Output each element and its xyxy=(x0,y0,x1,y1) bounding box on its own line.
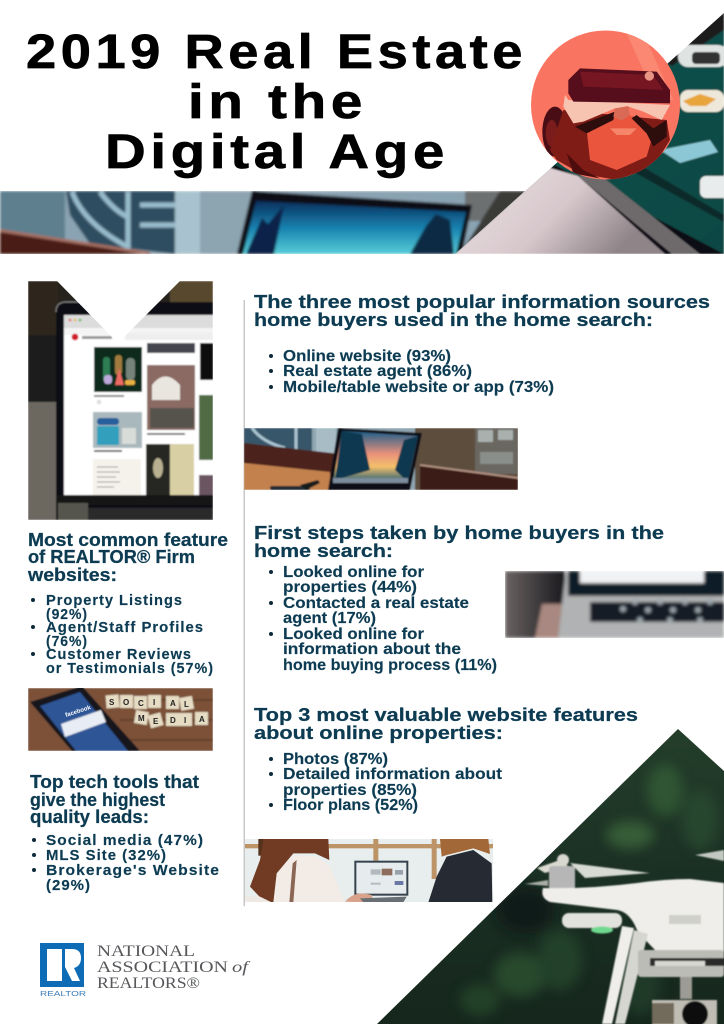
list: information sources: Real estate agent (86%) xyxy=(283,363,472,380)
logo: REALTOR R block xyxy=(40,943,87,998)
list: valuable features: Floor plans (52%) xyxy=(283,797,418,814)
photo: Facebook phone and social media tiles: O xyxy=(123,698,129,707)
heading: valuable website features: about online properties: xyxy=(254,722,503,743)
list: firm website features xyxy=(31,592,214,677)
heading: information sources xyxy=(254,291,710,330)
logo: National Association of Realtors wordmark: REALTORS® xyxy=(97,975,200,992)
list: firm website features: Property Listings xyxy=(46,592,183,609)
heading: top tech tools: Top tech tools that xyxy=(30,771,199,792)
list: first steps: properties (44%) xyxy=(283,579,417,596)
photo: Facebook phone and social media tiles: A xyxy=(199,715,205,724)
heading: first steps: home search: xyxy=(254,540,393,561)
icon: VR headset circle xyxy=(530,30,680,180)
title: 2019 Real Estate xyxy=(26,26,527,79)
heading: top tech tools: quality leads: xyxy=(30,806,149,827)
facebook wordmark: facebook xyxy=(65,705,92,719)
photo: laptop on desk xyxy=(244,428,518,490)
heading: information sources: home buyers used in the home search: xyxy=(254,309,653,330)
list: information sources: Mobile/table website or app (73%) xyxy=(283,379,554,396)
logo: National Association of Realtors wordmark: ASSOCIATION xyxy=(97,959,229,976)
list: tech tools: Brokerage's Website xyxy=(46,862,220,879)
heading: most common feature: websites: xyxy=(27,564,117,585)
photo: laptop keyboard xyxy=(505,571,724,638)
list: first steps: Looked online for xyxy=(283,626,424,643)
heading: first steps: First steps taken by home buyers in the xyxy=(254,522,664,543)
list: tech tools: MLS Site (32%) xyxy=(46,847,167,864)
list: firm website features: or Testimonials (57%) xyxy=(46,660,214,677)
heading: top tech tools xyxy=(30,771,199,827)
list: first steps xyxy=(269,564,497,674)
drone xyxy=(525,850,724,1024)
heading: most common feature xyxy=(27,529,228,585)
heading: valuable website features xyxy=(254,704,638,743)
heading: top tech tools: give the highest xyxy=(30,789,165,810)
logo: National Association of Realtors wordmark xyxy=(97,943,251,992)
photo: Facebook phone and social media tiles: E xyxy=(153,717,159,726)
photo: laptop showing Pinterest xyxy=(28,281,213,520)
photo: drone over forest xyxy=(370,725,724,1024)
list: tech tools xyxy=(32,832,220,894)
photo: two people at a laptop xyxy=(245,839,493,902)
logo: National Association of Realtors wordmark: NATIONAL xyxy=(97,943,195,960)
photo: Facebook phone and social media tiles: A xyxy=(170,699,176,708)
list: first steps: Contacted a real estate xyxy=(283,595,469,612)
logo: REALTOR R block: REALTOR xyxy=(40,989,87,998)
photo: Facebook phone and social media tiles: I xyxy=(153,698,155,707)
photo: Facebook phone and social media tiles: I xyxy=(184,716,186,725)
photo: Facebook phone and social media tiles: M xyxy=(138,714,145,723)
title: in the xyxy=(188,76,367,129)
list: firm website features: (92%) xyxy=(46,606,88,623)
title xyxy=(26,26,527,179)
list: firm website features: Agent/Staff Profiles xyxy=(46,619,204,636)
photo: header band with building and laptop xyxy=(0,191,530,255)
list: valuable features: Photos (87%) xyxy=(283,751,388,768)
photo: Facebook phone and social media tiles xyxy=(28,686,213,751)
list: first steps: Looked online for xyxy=(283,564,424,581)
heading: information sources: The three most popular information sources xyxy=(254,291,710,312)
photo: Facebook phone and social media tiles: C xyxy=(138,699,144,708)
list: information sources xyxy=(269,348,554,396)
list: valuable features: Detailed information about xyxy=(283,766,502,783)
list: tech tools: Social media (47%) xyxy=(46,832,204,849)
photo: Facebook phone and social media tiles: L xyxy=(184,700,189,709)
heading: most common feature: Most common feature xyxy=(28,529,228,550)
list: first steps: information about the xyxy=(283,641,461,658)
photo: phone and desk triangle xyxy=(455,13,724,254)
list: tech tools: (29%) xyxy=(46,877,91,894)
photo: Facebook phone and social media tiles: S xyxy=(109,698,115,707)
heading: valuable website features: Top 3 most valuable website features xyxy=(254,704,638,725)
list: valuable features: properties (85%) xyxy=(283,782,417,799)
list: information sources: Online website (93%) xyxy=(283,348,451,365)
list: firm website features: (76%) xyxy=(46,633,88,650)
list: first steps: home buying process (11%) xyxy=(283,657,497,674)
logo: National Association of Realtors wordmark: of xyxy=(232,959,251,976)
list: firm website features: Customer Reviews xyxy=(46,646,192,663)
divider line xyxy=(244,300,245,906)
list: valuable features xyxy=(269,751,502,814)
heading: most common feature: of REALTOR® Firm xyxy=(28,546,195,567)
photo: Facebook phone and social media tiles: D xyxy=(170,716,176,725)
list: first steps: agent (17%) xyxy=(283,610,376,627)
heading: first steps xyxy=(254,522,664,561)
title: Digital Age xyxy=(105,126,449,179)
